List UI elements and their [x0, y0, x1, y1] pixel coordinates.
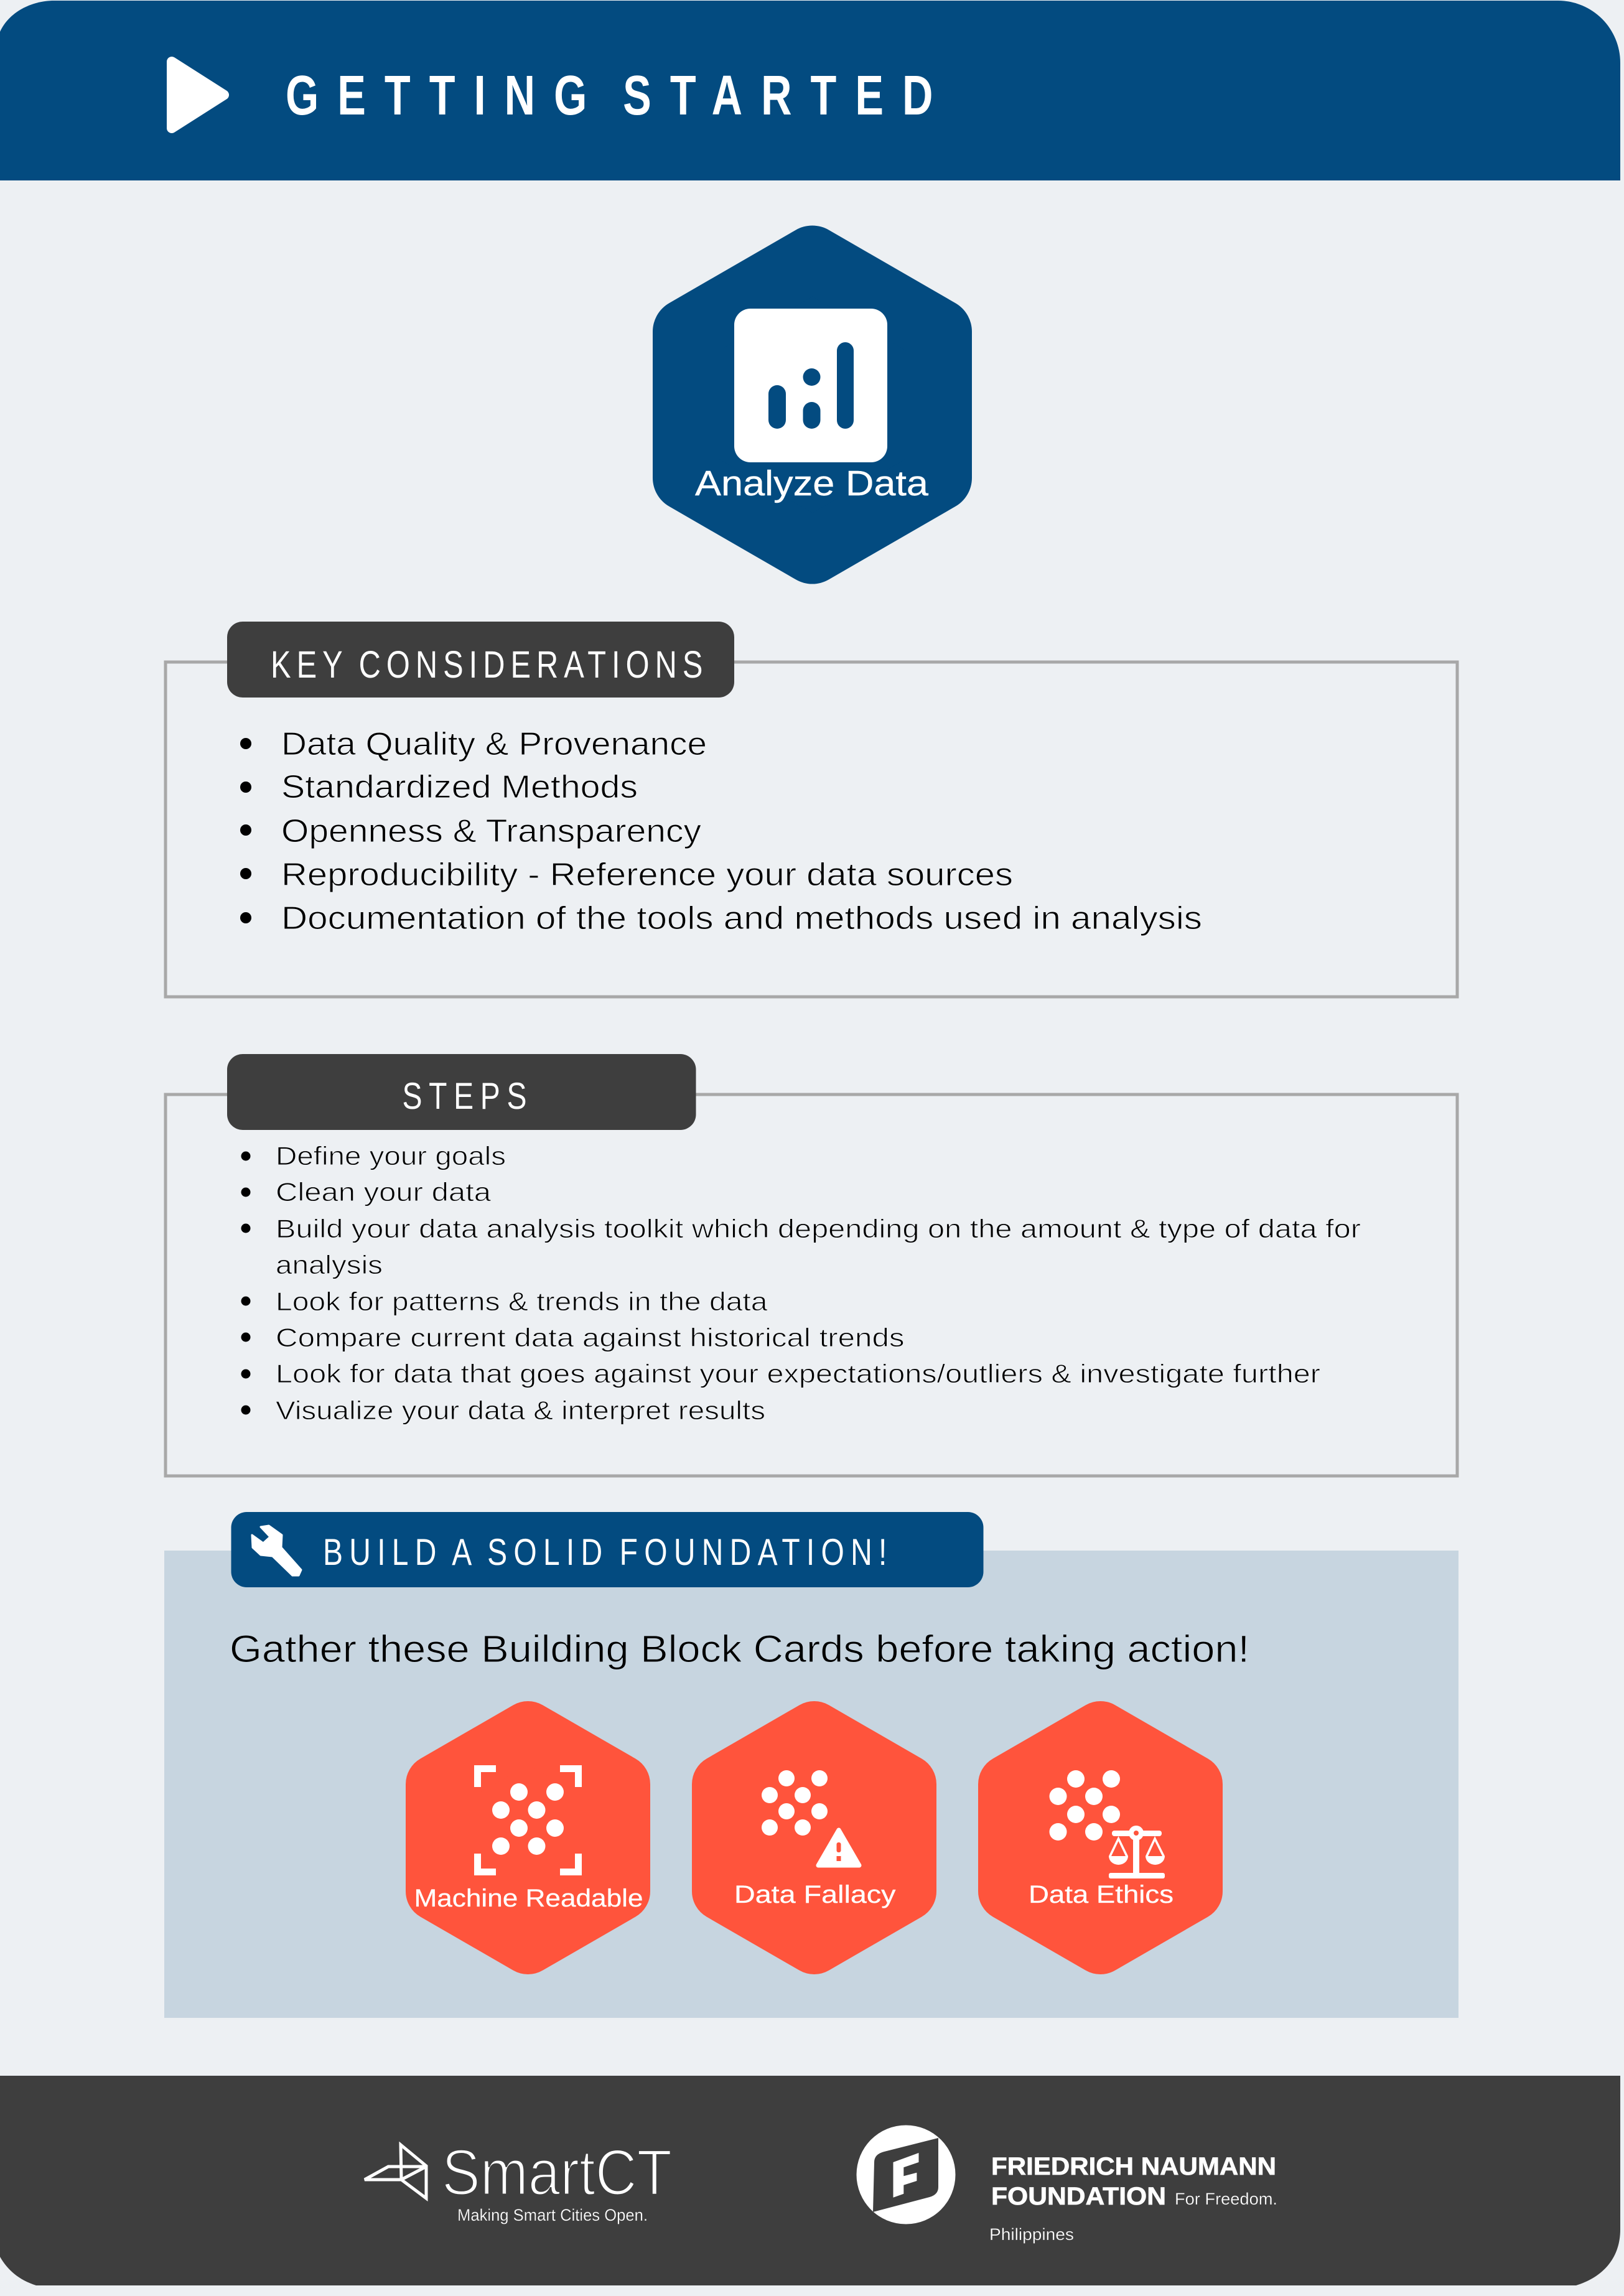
logo: Friedrich Naumann Foundation: FOUNDATION	[991, 2183, 1166, 2210]
list: steps: Look for data that goes against your expectations/outliers & investigate further	[276, 1359, 1320, 1388]
icon: bar chart	[734, 309, 887, 462]
list: steps: Look for patterns & trends in the data	[276, 1287, 768, 1316]
card: machine readable	[414, 1731, 643, 1945]
card label: Data Ethics	[1029, 1881, 1174, 1908]
foundation name: FRIEDRICH NAUMANN	[991, 2153, 1276, 2180]
card: data fallacy	[722, 1731, 907, 1945]
icon: dots with warning triangle	[762, 1770, 859, 1865]
country: Philippines	[989, 2225, 1074, 2244]
list: key considerations: Standardized Methods	[281, 769, 638, 805]
list: steps: Visualize your data & interpret results	[276, 1396, 765, 1425]
heading tab: build a solid foundation	[231, 1512, 983, 1587]
icon: wrench	[252, 1526, 301, 1575]
panel: steps	[166, 1054, 1457, 1476]
foundation tagline: For Freedom.	[1175, 2190, 1277, 2208]
badge: Analyze Data hexagon	[686, 259, 939, 551]
card label: Data Fallacy	[734, 1881, 896, 1908]
logo: SmartCT	[365, 2137, 672, 2224]
logo: Friedrich Naumann Foundation	[856, 2126, 1277, 2244]
footer band	[0, 2076, 1620, 2285]
badge label: Analyze Data	[695, 464, 928, 503]
list: steps: Define your goals	[276, 1141, 506, 1170]
card label: Machine Readable	[414, 1885, 643, 1912]
list: steps: analysis	[276, 1250, 383, 1279]
list: key considerations	[240, 726, 1202, 936]
heading tab: steps: STEPS	[402, 1075, 527, 1117]
list: steps: Clean your data	[276, 1177, 492, 1206]
list: key considerations: Documentation of the tools and methods used in analysis	[281, 900, 1202, 936]
card: data ethics	[1008, 1731, 1193, 1945]
icon: FNF circle	[856, 2126, 956, 2224]
list: steps: Build your data analysis toolkit which depending on the amount & type of data for	[276, 1214, 1361, 1243]
intro sentence: Gather these Building Block Cards before taking action!	[230, 1628, 1249, 1670]
list: key considerations: Openness & Transparency	[281, 813, 701, 849]
icon: play triangle	[172, 62, 224, 128]
title: GETTING STARTED	[286, 64, 933, 126]
icon: SmartCT folded star	[365, 2145, 426, 2198]
tagline: Making Smart Cities Open.	[457, 2206, 648, 2224]
wordmark: SmartCT	[442, 2137, 672, 2209]
heading tab: build a solid foundation: BUILD A SOLID FOUNDATION!	[323, 1531, 887, 1573]
list: key considerations: Reproducibility - Reference your data sources	[281, 857, 1013, 893]
panel: key considerations	[166, 622, 1457, 997]
list: key considerations: Data Quality & Provenance	[281, 726, 707, 762]
header band	[0, 1, 1620, 180]
heading tab: steps	[227, 1054, 696, 1130]
list: steps: Compare current data against historical trends	[276, 1323, 905, 1352]
icon: scan brackets with dots	[474, 1765, 582, 1875]
panel: build a solid foundation	[164, 1512, 1458, 2018]
icon: dots with balance scale	[1049, 1770, 1165, 1878]
heading tab: key considerations: KEY CONSIDERATIONS	[271, 643, 702, 686]
list: steps	[241, 1141, 1361, 1425]
heading tab: key considerations	[227, 622, 734, 698]
